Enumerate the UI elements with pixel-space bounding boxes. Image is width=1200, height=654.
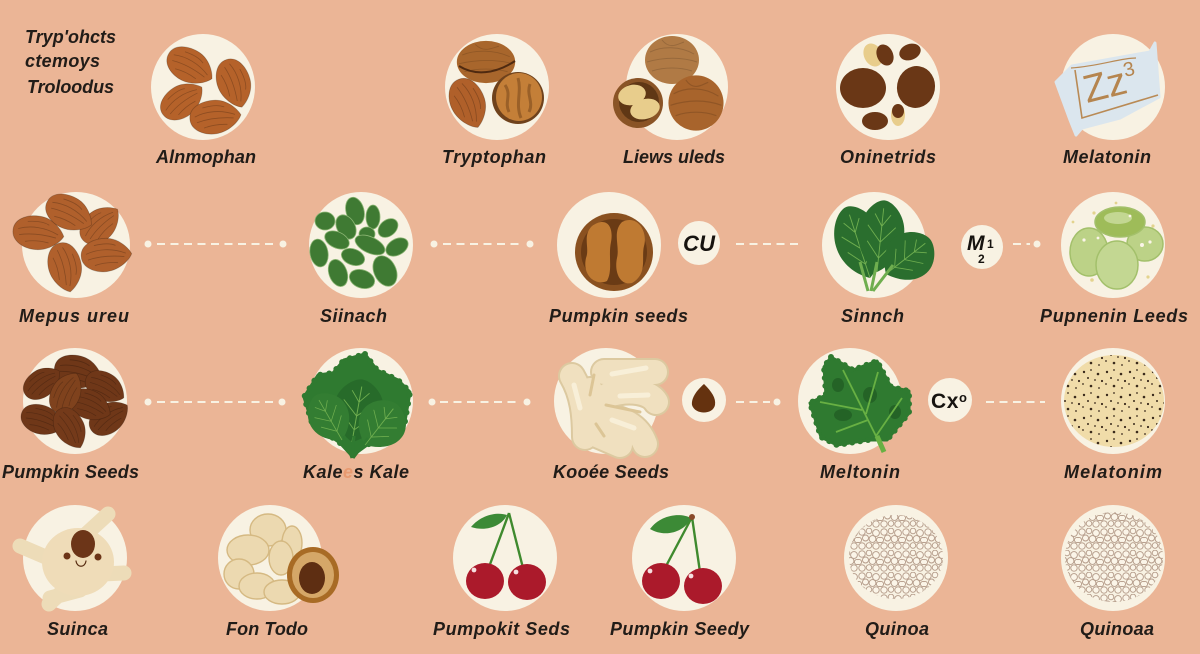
- panel: ginger character: [20, 505, 127, 639]
- panel: curly kale: [798, 348, 909, 482]
- icon: ginger root: [572, 368, 656, 445]
- callout: Cxo: [928, 378, 972, 422]
- panel: cherries: [433, 505, 570, 639]
- icon: walnut half: [575, 213, 653, 291]
- callout: M1 over 2: M: [967, 232, 985, 255]
- callout: Cxo: Cx: [931, 390, 958, 413]
- panel: quinoa 2: [1061, 505, 1165, 639]
- panel: dark nuts: Oninetrids: [840, 147, 936, 167]
- panel: green seeds pods: [1040, 192, 1188, 326]
- panel: pale nuts and pit: [218, 505, 339, 639]
- panel: walnut half: Pumpkin seeds: [549, 306, 688, 326]
- icon: dark almonds: [17, 350, 136, 454]
- icon: spinach leaves: [825, 198, 945, 293]
- panel: walnut half: [549, 192, 688, 326]
- panel: dark nuts: [836, 34, 940, 167]
- panel: almonds, row 1: Alnmophan: [155, 147, 256, 167]
- connector: [736, 243, 799, 245]
- icon: curly kale leaf: [810, 357, 909, 452]
- callout: CU: CU: [683, 231, 716, 256]
- panel: walnuts, tryptophan: [442, 34, 549, 167]
- icon: brown nuts: [840, 40, 938, 130]
- callout: Cxo: o: [959, 390, 967, 405]
- panel: pale quinoa: [1061, 348, 1165, 482]
- icon: packet with Zz: 3: [1121, 58, 1137, 82]
- panel: pale quinoa: Melatonim: [1064, 462, 1162, 482]
- icon: walnut and almond: [443, 41, 544, 134]
- callout: CU: [678, 221, 720, 265]
- panel: brown almonds row 3: Pumpkin Seeds: [2, 462, 139, 482]
- callout: M1 over 2: 2: [978, 252, 985, 266]
- callout: seed: [682, 378, 726, 422]
- icon: four almonds: [154, 39, 258, 136]
- panel: brown almonds row 3: [2, 348, 139, 482]
- panel: melatonin packet: [1056, 34, 1165, 167]
- icon: kale bunch: [299, 354, 416, 460]
- panel: ginger: Kooée Seeds: [553, 462, 669, 482]
- panel: quinoa: [844, 505, 948, 639]
- icon: packet with Zz: Zz: [1079, 60, 1131, 112]
- connector: [144, 398, 286, 406]
- icon: pale green pods: [1070, 202, 1163, 289]
- heading text block: Tryp'ohcts: [25, 27, 116, 47]
- connector: [1013, 240, 1040, 248]
- panel: almonds, row 2: [11, 187, 133, 326]
- panel: ginger: [553, 348, 669, 482]
- panel: walnuts, open shell: Liews uleds: [623, 147, 725, 167]
- callout: M1 over 2: [961, 225, 1003, 269]
- icon: seed: [692, 384, 715, 412]
- connector: [736, 398, 780, 406]
- panel: ginger character: Suinca: [47, 619, 108, 639]
- panel: walnuts, open shell: [613, 34, 728, 167]
- panel: spinach: Sinnch: [841, 306, 904, 326]
- icon: pale nuts with apricot pit: [224, 514, 339, 604]
- heading text block: Troloodus: [27, 77, 114, 97]
- heading text block: [25, 27, 116, 97]
- panel: curly kale: Meltonin: [820, 462, 900, 482]
- panel: pale nuts and pit: Fon Todo: [226, 619, 308, 639]
- panel: spinach: [822, 192, 945, 326]
- panel: walnuts, tryptophan: Tryptophan: [442, 147, 546, 167]
- panel: quinoa: Quinoa: [865, 619, 929, 639]
- panel: kale bunch: Kalees Kale: [303, 462, 409, 482]
- icon: three walnuts: [613, 36, 724, 131]
- panel: green seeds pods: Pupnenin Leeds: [1040, 306, 1188, 326]
- icon: ginger character: [20, 514, 124, 604]
- panel: quinoa 2: Quinoaa: [1080, 619, 1154, 639]
- icon: five almonds: [11, 187, 133, 295]
- connector: [430, 240, 534, 248]
- panel: cherries 2: [610, 505, 750, 639]
- icon: packet with Zz: [1056, 43, 1159, 135]
- icon: green seeds: [308, 195, 411, 292]
- icon: cherries: [642, 514, 722, 604]
- panel: almonds, row 1: [151, 34, 258, 167]
- panel: green pumpkin seeds: [308, 192, 413, 326]
- panel: cherries: Pumpokit Seds: [433, 619, 570, 639]
- icon: speckled quinoa: [1064, 355, 1164, 447]
- panel: almonds, row 2: Mepus ureu: [19, 306, 129, 326]
- icon: quinoa grains: [849, 515, 943, 599]
- icon: cherries: [466, 513, 546, 600]
- panel: green pumpkin seeds: Siinach: [320, 306, 387, 326]
- panel: melatonin packet: Melatonin: [1063, 147, 1151, 167]
- connector: [986, 401, 1045, 403]
- connector: [428, 398, 530, 406]
- connector: [144, 240, 286, 248]
- heading text block: ctemoys: [25, 51, 100, 71]
- icon: quinoa grains dense: [1065, 512, 1163, 602]
- panel: cherries 2: Pumpkin Seedy: [610, 619, 750, 639]
- callout: M1 over 2: 1: [987, 237, 994, 251]
- panel: kale bunch: [299, 348, 416, 482]
